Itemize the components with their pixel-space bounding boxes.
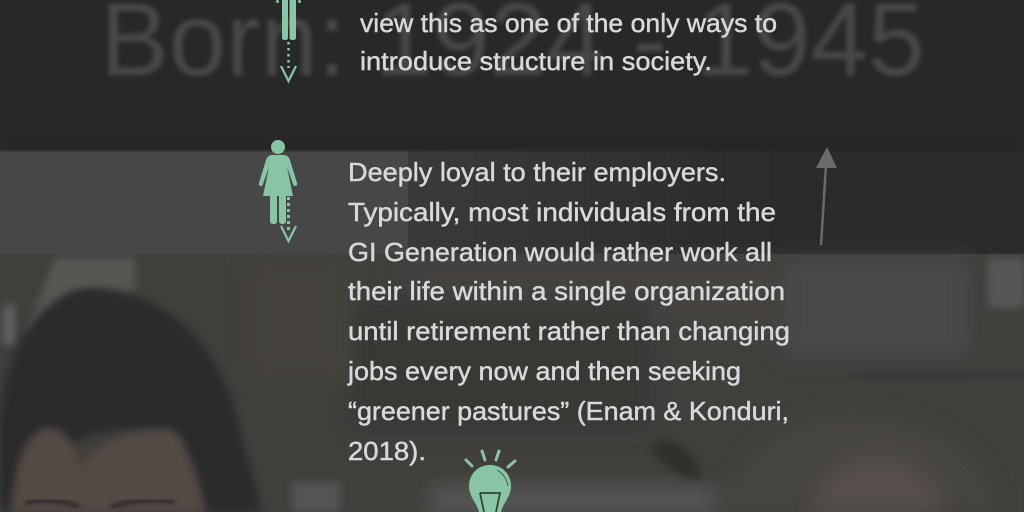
arrow: grey upward [816, 147, 837, 245]
icon: light bulb [466, 451, 515, 512]
top text block: view this as one of the only ways to [360, 8, 777, 38]
main text block: Deeply loyal to their employers. [348, 157, 726, 187]
background photo: two people, darkened [0, 140, 1024, 512]
main text block: jobs every now and then seeking [347, 356, 741, 386]
main text block: until retirement rather than changing [348, 316, 790, 346]
main text block: GI Generation would rather work all [348, 237, 772, 267]
main text block: their life within a single organization [348, 276, 785, 306]
top text block: introduce structure in society. [360, 46, 712, 76]
main text block [347, 157, 790, 466]
main text block: 2018). [348, 436, 426, 466]
main text block: “greener pastures” (Enam & Konduri, [348, 396, 789, 426]
icon: female figure with dotted down arrow [259, 140, 297, 241]
icon: male figure legs with dotted down arrow [276, 0, 301, 81]
main text block: Typically, most individuals from the [348, 197, 776, 227]
top text block [360, 8, 777, 76]
